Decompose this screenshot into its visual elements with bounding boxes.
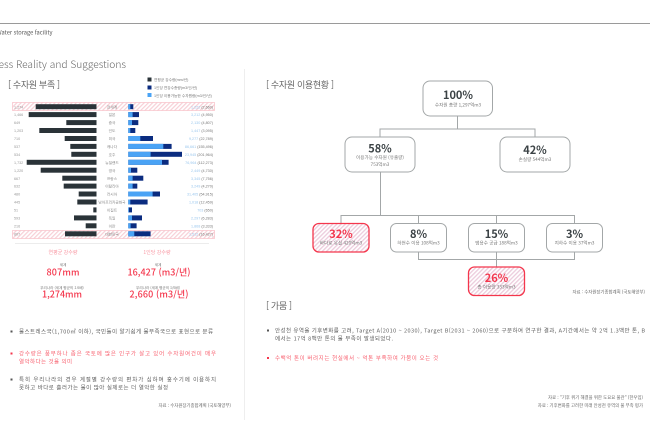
node: river use 8% xyxy=(390,224,446,252)
country labels: 러시아 xyxy=(107,192,118,198)
source: left panel: 자료 : 수자원장기종합계획 (국토해양부) xyxy=(158,402,232,409)
node: loss 42%: 42% xyxy=(523,142,547,158)
summary: annual precipitation xyxy=(40,249,84,300)
country labels: 전세계 xyxy=(107,104,118,110)
legend: 1인당 연강수총량(m3/인/년) xyxy=(154,85,197,90)
node: dam supply 15%: 15% xyxy=(485,226,509,242)
country labels: 뉴질랜드 xyxy=(105,160,119,166)
country labels: 호주 xyxy=(109,152,116,158)
summary: annual precipitation: 807mm xyxy=(46,266,80,278)
country labels: 이집트 xyxy=(107,208,118,214)
country labels xyxy=(98,104,126,237)
country labels: 미국 xyxy=(109,136,116,142)
node: sea outflow 32% xyxy=(313,224,369,252)
left values: precipitation: 1,203 xyxy=(14,129,23,133)
left values: precipitation: 1,220 xyxy=(14,169,23,173)
bullet: water stress country: 물스트레스국(1,700㎥ 이하), 국민들이 알기쉽게 물부족국으로 표현으로 분류 xyxy=(19,328,213,336)
left values: precipitation: 1,732 xyxy=(14,161,23,165)
tree connectors xyxy=(341,116,574,267)
left values: precipitation: 593 xyxy=(14,216,20,220)
legend xyxy=(148,77,212,98)
left values: precipitation: 534 xyxy=(14,153,20,157)
bullet: drought note: 수백억 톤이 버려지는 현실에서 ~ 억톤 부족하여 가뭄이 오는 것 xyxy=(275,354,438,362)
country labels: 남아프리카공화국 xyxy=(98,200,126,206)
right values: water per capita xyxy=(185,105,213,236)
summary: water per capita: 2,660 (m3/년) xyxy=(130,288,188,300)
left values: precipitation: 807 xyxy=(14,232,20,236)
left values: precipitation: 480 xyxy=(14,193,20,197)
bullet: highlighted note: 강수량은 풍부하나 좁은 국토에 많은 인구가 살고 있어 수자원여건이 매우 xyxy=(19,350,216,358)
right values: water per capita: 1,512 (16,427) xyxy=(189,232,213,236)
summary: water per capita: 세계 xyxy=(155,262,161,268)
country labels: 영국 xyxy=(109,168,116,174)
node: total 100%: 수자원 총량 1,297억m3 xyxy=(435,102,482,108)
node: dam supply 15%: 댐용수 공급 188억m3 xyxy=(475,240,518,246)
node: river use 8%: 하천수 이용 108억m3 xyxy=(397,240,440,246)
node: total use 26%: 26% xyxy=(485,270,509,286)
left values: precipitation: 649 xyxy=(14,121,20,125)
right values: water per capita: 9,277 (22,789) xyxy=(189,137,213,141)
node: usable 58%: 58% xyxy=(368,140,392,156)
node: groundwater 3%: 지하수 이용 37억m3 xyxy=(555,240,595,246)
node: usable 58%: 753억m3 xyxy=(371,161,390,168)
source: drought xyxy=(538,394,644,409)
source: drought: 자료 : 기후변화를 고려한 미래 안성천 유역의 물 부족 평가 xyxy=(538,402,643,409)
heading: water shortage: [ 수자원 부족 ] xyxy=(8,78,60,91)
right values: water per capita: 76,964 (112,273) xyxy=(185,161,213,165)
node: total use 26%: 총 이용량 333억m3 xyxy=(477,284,516,290)
right values: water per capita: 3,345 (7,756) xyxy=(191,177,213,181)
heading: water use status: [ 수자원 이용현황 ] xyxy=(266,78,334,91)
right values: water per capita: 1,447 (3,095) xyxy=(191,129,213,133)
left values: precipitation xyxy=(14,105,23,236)
summary: annual precipitation: 1,274mm xyxy=(42,288,82,300)
highlight bands xyxy=(12,102,214,238)
right values: water per capita: 2,130 (4,807) xyxy=(191,121,213,125)
left values: precipitation: 51 xyxy=(14,208,18,212)
country labels: 인도 xyxy=(109,128,116,134)
left values: precipitation: 445 xyxy=(14,201,20,205)
bar chart: water per capita xyxy=(128,104,182,236)
left values: precipitation: 632 xyxy=(14,185,20,189)
summary: water per capita: 1인당 강수량 xyxy=(143,249,171,256)
bullet: anseong stream study: 안성천 유역을 기후변화를 고려, Target A(2010 ~ 2030), Target B(2031 ~ 2060)으로 구분하여 연구한 결과, A기간에서는 약 2억 1.3백만 톤, B xyxy=(275,326,645,334)
node: loss 42% xyxy=(500,137,570,172)
bullet: highlighted note: 열악하다는 것을 의미 xyxy=(19,358,72,366)
summary: water per capita xyxy=(128,249,190,300)
node: usable 58% xyxy=(345,137,415,172)
right values: water per capita: 1,018 (12,459) xyxy=(189,201,213,205)
left values: precipitation: 537 xyxy=(14,145,20,149)
country labels: 이란 xyxy=(109,223,116,229)
source: drought: 자료 : "기후 위기 해결을 위한 도요요 물관" (한우입) xyxy=(548,394,644,401)
bullet: seasonal runoff xyxy=(10,376,216,392)
country labels: 프랑스 xyxy=(107,176,118,182)
summary: annual precipitation: 연평균 강수량 xyxy=(48,249,78,256)
node: dam supply 15% xyxy=(468,224,524,252)
right values: water per capita: 86,661 (155,496) xyxy=(185,145,213,149)
right values: water per capita: 2,449 (4,730) xyxy=(191,169,213,173)
node: loss 42%: 손실량 544억m3 xyxy=(519,156,552,163)
source: tree: 자료 : 수자원장기종합계획 (국토해양부) xyxy=(572,288,646,296)
right values: water per capita: 23,945 (201,964) xyxy=(185,153,213,157)
node: usable 58%: 이용가능 수자원 (유출량) xyxy=(356,154,404,161)
node: sea outflow 32%: 32% xyxy=(329,226,353,242)
node: total 100% xyxy=(423,81,492,116)
left values: precipitation: 1,274 xyxy=(14,105,23,109)
node: total 100%: 100% xyxy=(443,87,473,103)
right values: water per capita: 1,222 (2,660) xyxy=(191,105,213,109)
left values: precipitation: 216 xyxy=(14,224,20,228)
right values: water per capita: 3,249 (4,270) xyxy=(191,185,213,189)
right values: water per capita: 1,868 (3,333) xyxy=(191,224,213,228)
summary: annual precipitation: 세계 xyxy=(60,262,66,268)
country labels: 독일 xyxy=(109,216,116,222)
left values: precipitation: 710 xyxy=(14,137,20,141)
bullet: anseong stream study: 에서는 17억 8백만 톤의 물 부족이 발생되었다. xyxy=(275,334,393,342)
left values: precipitation: 667 xyxy=(14,177,20,181)
country labels: 일본 xyxy=(109,112,116,118)
bullet: seasonal runoff: 못하고 바다로 흘러가는 물이 많아 실제로는 더 열악한 실정 xyxy=(19,384,168,392)
bar chart: precipitation by country xyxy=(27,104,97,236)
bullet: anseong stream study xyxy=(267,326,645,342)
left values: precipitation: 1,466 xyxy=(14,113,23,117)
right values: water per capita: 703 (650) xyxy=(197,208,213,212)
country labels: 캐나다 xyxy=(107,144,118,150)
legend: 연평균 강수량(mm/년) xyxy=(154,77,188,82)
summary: water per capita: 16,427 (m3/년) xyxy=(128,266,190,278)
heading: drought: [ 가뭄 ] xyxy=(266,299,292,312)
node: total use 26% xyxy=(468,267,524,296)
country labels: 이탈리아 xyxy=(105,184,119,190)
country labels: 중국 xyxy=(109,121,116,126)
summary: water per capita: 우리나라 (세계 평균의 1/6배) xyxy=(136,285,180,291)
bullet: highlighted note xyxy=(10,350,216,366)
summary: annual precipitation: 우리나라 (세계 평균의 1.6배) xyxy=(40,285,84,291)
node: river use 8%: 8% xyxy=(410,226,427,242)
node: sea outflow 32%: 바다로 유실 420억m3 xyxy=(320,240,363,246)
bullet: seasonal runoff: 특히 우리나라의 경우 계절별 강수량의 편차가 심하며 홍수기에 이용하지 xyxy=(19,376,216,384)
node: groundwater 3% xyxy=(546,224,602,252)
node: groundwater 3%: 3% xyxy=(566,226,583,242)
right values: water per capita: 2,297 (6,283) xyxy=(191,216,213,220)
right values: water per capita: 3,212 (4,950) xyxy=(191,113,213,117)
country labels: 대한민국 xyxy=(105,231,119,237)
right values: water per capita: 31,405 (54,915) xyxy=(187,193,213,197)
legend: 1인당 이용가능한 수자원량(m3/인/년) xyxy=(154,93,212,98)
